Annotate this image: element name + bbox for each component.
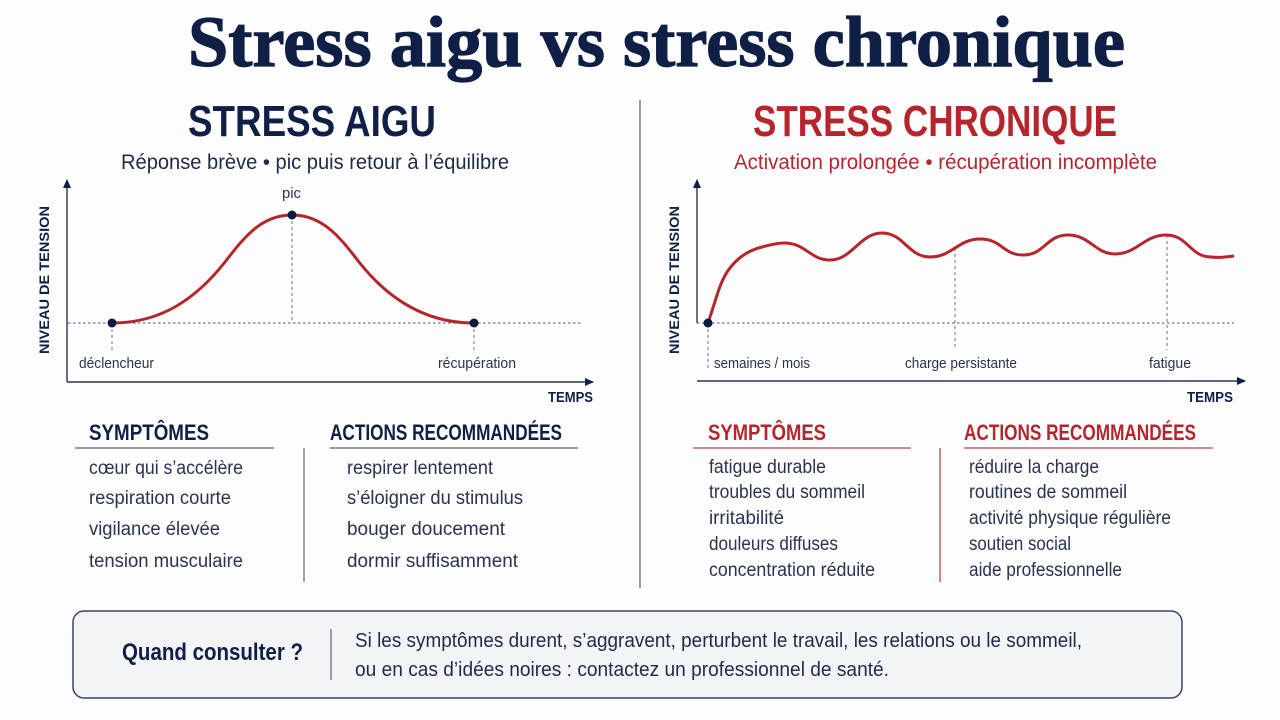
list: actions: routines de sommeil: [969, 482, 1127, 503]
list: actions: [347, 458, 523, 572]
subtitle: stress aigu: Réponse brève • pic puis retour à l’équilibre: [121, 150, 509, 174]
callout text: [355, 630, 1082, 681]
list: symptômes: irritabilité: [709, 508, 784, 529]
x axis: [697, 380, 1245, 382]
red curve: [112, 215, 474, 323]
list: symptômes: [89, 458, 243, 572]
list: actions: activité physique régulière: [969, 508, 1171, 529]
panel: stress aigu: [37, 97, 593, 582]
subtitle: stress chronique: Activation prolongée • récupération incomplète: [734, 150, 1157, 174]
callout text: ou en cas d’idées noires : contactez un professionnel de santé.: [355, 659, 889, 681]
list: actions: soutien social: [969, 534, 1071, 555]
list: actions: s’éloigner du stimulus: [347, 488, 523, 509]
list: actions: [969, 457, 1171, 581]
label: récupération: récupération: [438, 355, 516, 372]
column: actions chronique: [964, 420, 1213, 581]
x axis: [67, 381, 593, 383]
column: symptômes chronique: [693, 420, 911, 581]
list: actions: dormir suffisamment: [347, 551, 519, 572]
list: actions: aide professionnelle: [969, 560, 1122, 581]
list: symptômes: [709, 457, 875, 581]
point: récupération: [470, 318, 478, 328]
label: charge persistante: charge persistante: [905, 355, 1017, 372]
list: symptômes: cœur qui s’accélère: [89, 458, 243, 479]
heading: actions recommandées: ACTIONS RECOMMANDÉES: [330, 420, 562, 445]
list: actions: réduire la charge: [969, 457, 1099, 478]
y axis: [696, 180, 698, 323]
heading: stress aigu: STRESS AIGU: [188, 97, 436, 146]
heading: actions recommandées: ACTIONS RECOMMANDÉES: [964, 420, 1196, 445]
list: symptômes: tension musculaire: [89, 551, 243, 572]
list: actions: respirer lentement: [347, 458, 494, 479]
list: symptômes: fatigue durable: [709, 457, 826, 478]
chart: courbe stress chronique: [667, 180, 1245, 406]
heading: symptômes: SYMPTÔMES: [89, 420, 209, 445]
y axis label: NIVEAU DE TENSION: [667, 206, 682, 354]
point: pic: [288, 210, 296, 220]
y axis label: NIVEAU DE TENSION: [37, 206, 52, 354]
list: symptômes: vigilance élevée: [89, 519, 220, 540]
heading: stress chronique: STRESS CHRONIQUE: [753, 97, 1117, 146]
point: départ: [704, 318, 712, 328]
list: symptômes: respiration courte: [89, 488, 231, 509]
list: symptômes: douleurs diffuses: [709, 534, 838, 555]
column: actions aigu: [330, 420, 578, 572]
list: actions: bouger doucement: [347, 519, 506, 540]
x axis label: TEMPS: [1187, 390, 1233, 406]
point: déclencheur: [108, 318, 116, 328]
list: symptômes: troubles du sommeil: [709, 482, 865, 503]
label: pic: pic: [282, 185, 301, 202]
x axis label: TEMPS: [548, 390, 593, 406]
label: déclencheur: déclencheur: [79, 355, 154, 372]
label: fatigue: fatigue: [1149, 355, 1191, 372]
callout: quand consulter: [73, 611, 1182, 698]
heading: symptômes: SYMPTÔMES: [708, 420, 826, 445]
list: symptômes: concentration réduite: [709, 560, 875, 581]
panel: stress chronique: [667, 97, 1245, 582]
title: Stress aigu vs stress chronique: [188, 2, 1125, 82]
callout text: Si les symptômes durent, s’aggravent, perturbent le travail, les relations ou le sommeil,: [355, 630, 1082, 652]
label: semaines / mois: semaines / mois: [714, 355, 810, 372]
column: symptômes aigu: [75, 420, 274, 572]
chart: courbe stress aigu: [37, 180, 593, 406]
callout heading: Quand consulter ?: [122, 639, 303, 666]
red curve: [708, 233, 1234, 323]
y axis: [66, 180, 68, 382]
